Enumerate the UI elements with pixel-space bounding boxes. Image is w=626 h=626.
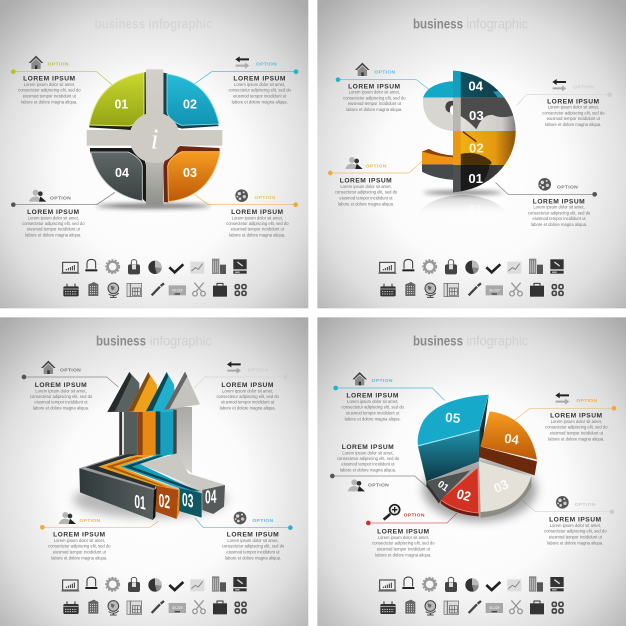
chart: four 3D arrows (73, 372, 227, 520)
text block: top left: labore et dolore magna aliqua. (21, 99, 77, 104)
text block: bottom right (222, 532, 285, 560)
connector lines (22, 375, 293, 530)
text block: bottom right (226, 209, 289, 238)
option labels: OPTION (79, 518, 101, 524)
text block: top right (216, 382, 280, 411)
icon grid: 00-229 (172, 606, 183, 610)
connector lines (330, 386, 616, 525)
text block: top right (542, 98, 605, 127)
text block: top left: eiusmod tempor incididunt ut (34, 400, 88, 405)
text block: option 01: LOREM IPSUM (342, 444, 394, 451)
option labels: OPTION (372, 378, 393, 384)
text block: bottom left (48, 532, 111, 560)
text block: option 02: eiusmod tempor incididunt ut (377, 546, 431, 551)
text block: top left: LOREM IPSUM (348, 83, 401, 90)
text block: bottom right: LOREM IPSUM (227, 532, 279, 539)
text block: option 02: consectetur adipiscing elit, sed do (372, 541, 435, 546)
text block: top right: Lorem ipsum dolor sit amet, (548, 105, 599, 110)
chart: four quadrant circle: 02 (183, 96, 197, 111)
text block: option 03 (544, 517, 607, 545)
option labels: OPTION (248, 367, 269, 373)
chart: dollar shaped globe: 03 (469, 108, 484, 123)
heading (96, 332, 212, 348)
text block: top right: LOREM IPSUM (233, 76, 286, 83)
text block: top left: Lorem ipsum dolor sit amet, (24, 82, 75, 87)
panel: pie cross infographic (0, 0, 308, 308)
connector lines (11, 69, 298, 207)
icon grid (378, 259, 564, 297)
option labels: OPTION (557, 184, 578, 190)
chart: 3D pie (418, 395, 537, 521)
text block: bottom right: consectetur adipiscing elit, sed do (528, 210, 591, 215)
text block: top right: labore et dolore magna aliqua. (220, 406, 276, 411)
chart: four quadrant circle: 04 (115, 165, 130, 180)
text block: option 03: Lorem ipsum dolor sit amet, (550, 523, 601, 528)
text block: bottom right: LOREM IPSUM (533, 198, 585, 205)
connector lines (328, 77, 612, 197)
text block: top left: labore et dolore magna aliqua. (346, 107, 402, 112)
text block: top left (30, 382, 93, 411)
heading: infographic (466, 332, 528, 348)
text block: bottom right: consectetur adipiscing elit, sed do (222, 544, 285, 549)
text block: bottom left: LOREM IPSUM (340, 178, 392, 185)
text block: bottom right: Lorem ipsum dolor sit amet, (533, 205, 585, 210)
chart: four 3D arrows: 02 (159, 490, 170, 514)
text block: top right (228, 76, 292, 104)
chart: 3D pie: 04 (503, 431, 521, 448)
text block: top right: eiusmod tempor incididunt ut (233, 93, 287, 98)
icon grid (61, 259, 247, 297)
text block: option 04: consectetur adipiscing elit, sed do (545, 425, 608, 430)
icon: people (59, 512, 76, 524)
text block: top left (343, 83, 406, 112)
text block: option 05: LOREM IPSUM (346, 393, 399, 400)
chart: 3D pie: 03 (491, 476, 511, 496)
option labels (366, 70, 594, 190)
chart: dollar shaped globe: 02 (469, 140, 484, 155)
icon: house (355, 63, 370, 76)
icon: globe (234, 512, 246, 524)
option labels: OPTION (50, 195, 71, 201)
text block: top left: Lorem ipsum dolor sit amet, (35, 388, 87, 393)
text block: option 05: consectetur adipiscing elit, sed do (341, 405, 405, 410)
text block: top right: eiusmod tempor incididunt ut (547, 116, 601, 121)
text block: top right: consectetur adipiscing elit, sed do (216, 394, 280, 399)
option labels (60, 367, 274, 524)
icon: magnifier (384, 505, 400, 520)
text block: top left: eiusmod tempor incididunt ut (348, 101, 402, 106)
text block: bottom left: eiusmod tempor incididunt ut (53, 549, 107, 554)
icon grid (61, 576, 247, 615)
panel: dollar globe infographic (317, 0, 626, 308)
chart: dollar shaped globe (416, 71, 523, 217)
text block: bottom left: consectetur adipiscing elit, sed do (22, 221, 85, 226)
text block: bottom left: labore et dolore magna aliqua. (338, 201, 394, 206)
icon: arrows (227, 361, 241, 374)
text block: top left: consectetur adipiscing elit, sed do (30, 394, 93, 399)
chart: dollar shaped globe: 01 (468, 201, 484, 216)
icon: globe (556, 496, 569, 509)
option labels: OPTION (576, 398, 598, 404)
text block: top right: Lorem ipsum dolor sit amet, (234, 82, 285, 87)
heading: business (413, 332, 463, 348)
text block: bottom right: eiusmod tempor incididunt ut (532, 216, 586, 221)
option labels: OPTION (60, 367, 81, 373)
panel: arrows infographic (0, 317, 308, 626)
text block: top left (18, 76, 81, 104)
text block: top left: eiusmod tempor incididunt ut (23, 93, 77, 98)
text block: option 01 (337, 444, 400, 473)
text block: top left: LOREM IPSUM (35, 382, 87, 389)
icon: arrows (555, 392, 569, 405)
option labels: OPTION (374, 70, 396, 76)
text block: option 02: Lorem ipsum dolor sit amet, (378, 535, 429, 540)
text block: bottom left: LOREM IPSUM (53, 532, 106, 539)
text block: option 01: consectetur adipiscing elit, sed do (337, 456, 400, 461)
text block: top right: labore et dolore magna aliqua. (545, 122, 601, 127)
text block: bottom right (528, 198, 591, 227)
text block: top left: labore et dolore magna aliqua. (33, 406, 89, 411)
text block: bottom right: eiusmod tempor incididunt ut (226, 549, 280, 554)
text block: bottom right: eiusmod tempor incididunt ut (231, 227, 285, 232)
text block: bottom right: consectetur adipiscing elit, sed do (226, 221, 289, 226)
text block: bottom left (22, 209, 85, 238)
text block: option 02: labore et dolore magna aliqua. (375, 552, 431, 557)
text block: bottom right: LOREM IPSUM (231, 209, 284, 216)
text block: option 04: eiusmod tempor incididunt ut (550, 430, 604, 435)
text block: option 05 (341, 393, 405, 421)
text block: option 01: eiusmod tempor incididunt ut (341, 462, 395, 467)
text block: option 03: consectetur adipiscing elit, sed do (544, 529, 607, 534)
icon: globe (235, 189, 248, 202)
chart: dollar shaped globe: 01 (468, 171, 484, 186)
text block: option 01: Lorem ipsum dolor sit amet, (342, 450, 394, 455)
text block: bottom left: eiusmod tempor incididunt ut (339, 195, 393, 200)
text block: top right: Lorem ipsum dolor sit amet, (222, 388, 273, 393)
text block: top right: LOREM IPSUM (547, 98, 600, 105)
option labels: OPTION (368, 482, 389, 488)
option labels: OPTION (573, 85, 594, 91)
text block: option 04: Lorem ipsum dolor sit amet, (551, 419, 602, 424)
icon: arrows (235, 56, 249, 69)
text block: bottom left: eiusmod tempor incididunt ut (27, 227, 81, 232)
option labels: OPTION (252, 518, 274, 524)
text block: option 04: LOREM IPSUM (550, 413, 603, 420)
icon grid: 00-229 (172, 288, 183, 292)
text block: bottom right: Lorem ipsum dolor sit amet, (227, 538, 279, 543)
text block: option 05: labore et dolore magna aliqua. (345, 416, 401, 421)
icon: house (352, 372, 367, 385)
icon grid: 00-229 (489, 606, 500, 610)
chart: four quadrant circle: 03 (183, 165, 197, 180)
text block: option 02: LOREM IPSUM (377, 529, 430, 536)
icon: arrows (552, 79, 566, 91)
text block: top right: consectetur adipiscing elit, sed do (228, 88, 292, 93)
text block: top left: consectetur adipiscing elit, sed do (18, 88, 81, 93)
chart: dollar shaped globe: 04 (468, 78, 484, 93)
icon grid: 00-229 (489, 288, 500, 292)
chart: four quadrant circle (87, 69, 222, 208)
icon: people (29, 190, 46, 202)
text block: top right: eiusmod tempor incididunt ut (221, 400, 275, 405)
option labels: OPTION (48, 62, 69, 68)
text block: top left: LOREM IPSUM (23, 76, 76, 83)
chart: four quadrant circle: 01 (115, 96, 129, 111)
text block: option 03: LOREM IPSUM (549, 517, 602, 524)
heading: infographic (148, 15, 213, 31)
option labels: OPTION (256, 62, 277, 68)
text block: top right: consectetur adipiscing elit, sed do (542, 110, 605, 115)
text block: option 05: eiusmod tempor incididunt ut (346, 410, 400, 415)
text block: bottom right: labore et dolore magna aliqua. (531, 222, 587, 227)
heading (413, 332, 528, 348)
option labels: OPTION (404, 513, 425, 519)
text block: bottom left: labore et dolore magna aliqua. (25, 233, 81, 238)
icon grid (378, 576, 564, 615)
text block: option 01: labore et dolore magna aliqua. (340, 468, 396, 473)
text block: bottom left: labore et dolore magna aliqua. (51, 555, 107, 560)
text block: bottom left: consectetur adipiscing elit, sed do (335, 190, 398, 195)
text block: bottom left: LOREM IPSUM (27, 209, 80, 216)
panel: 3D pie infographic (317, 317, 626, 626)
chart: 3D pie: 05 (444, 410, 462, 426)
heading: infographic (150, 332, 212, 348)
heading (94, 15, 213, 31)
text block: bottom left: Lorem ipsum dolor sit amet, (54, 538, 105, 543)
text block: bottom right: labore et dolore magna aliqua. (225, 555, 281, 560)
text block: option 04: labore et dolore magna aliqua. (548, 436, 604, 441)
icon: globe (538, 178, 551, 191)
text block: bottom right: labore et dolore magna aliqua. (229, 233, 285, 238)
heading: business (413, 15, 463, 31)
icon: house (29, 56, 43, 69)
text block: top left: Lorem ipsum dolor sit amet, (349, 90, 400, 95)
heading (413, 15, 528, 31)
text block: bottom right: Lorem ipsum dolor sit amet, (232, 215, 283, 220)
text block: option 03: eiusmod tempor incididunt ut (549, 534, 603, 539)
text block: option 02 (372, 529, 435, 557)
heading: business (96, 332, 146, 348)
text block: top right: LOREM IPSUM (221, 382, 274, 389)
heading: infographic (466, 15, 528, 31)
chart: four quadrant circle: i (151, 124, 159, 156)
text block: bottom left: consectetur adipiscing elit, sed do (48, 544, 111, 549)
text block: top right: labore et dolore magna aliqua. (232, 99, 288, 104)
option labels: OPTION (575, 502, 596, 508)
text block: bottom left: Lorem ipsum dolor sit amet, (340, 184, 392, 189)
chart: four 3D arrows: 01 (134, 491, 146, 515)
heading: business (94, 15, 145, 31)
icon: people (348, 479, 365, 491)
text block: bottom left (335, 178, 398, 206)
option labels (368, 378, 598, 519)
text block: option 03: labore et dolore magna aliqua. (547, 540, 603, 545)
chart: four 3D arrows: 03 (182, 489, 193, 513)
chart: 3D pie: 02 (455, 486, 473, 504)
chart: 3D pie: 01 (435, 479, 451, 494)
text block: top left: consectetur adipiscing elit, sed do (343, 95, 406, 100)
icon: house (41, 361, 56, 374)
chart: four 3D arrows: 04 (205, 486, 217, 509)
option labels (48, 62, 277, 201)
text block: option 04 (545, 413, 608, 441)
option labels: OPTION (366, 164, 387, 170)
text block: bottom left: Lorem ipsum dolor sit amet, (28, 215, 79, 220)
icon: people (345, 157, 363, 169)
option labels: OPTION (254, 195, 276, 201)
text block: option 05: Lorem ipsum dolor sit amet, (347, 399, 398, 404)
